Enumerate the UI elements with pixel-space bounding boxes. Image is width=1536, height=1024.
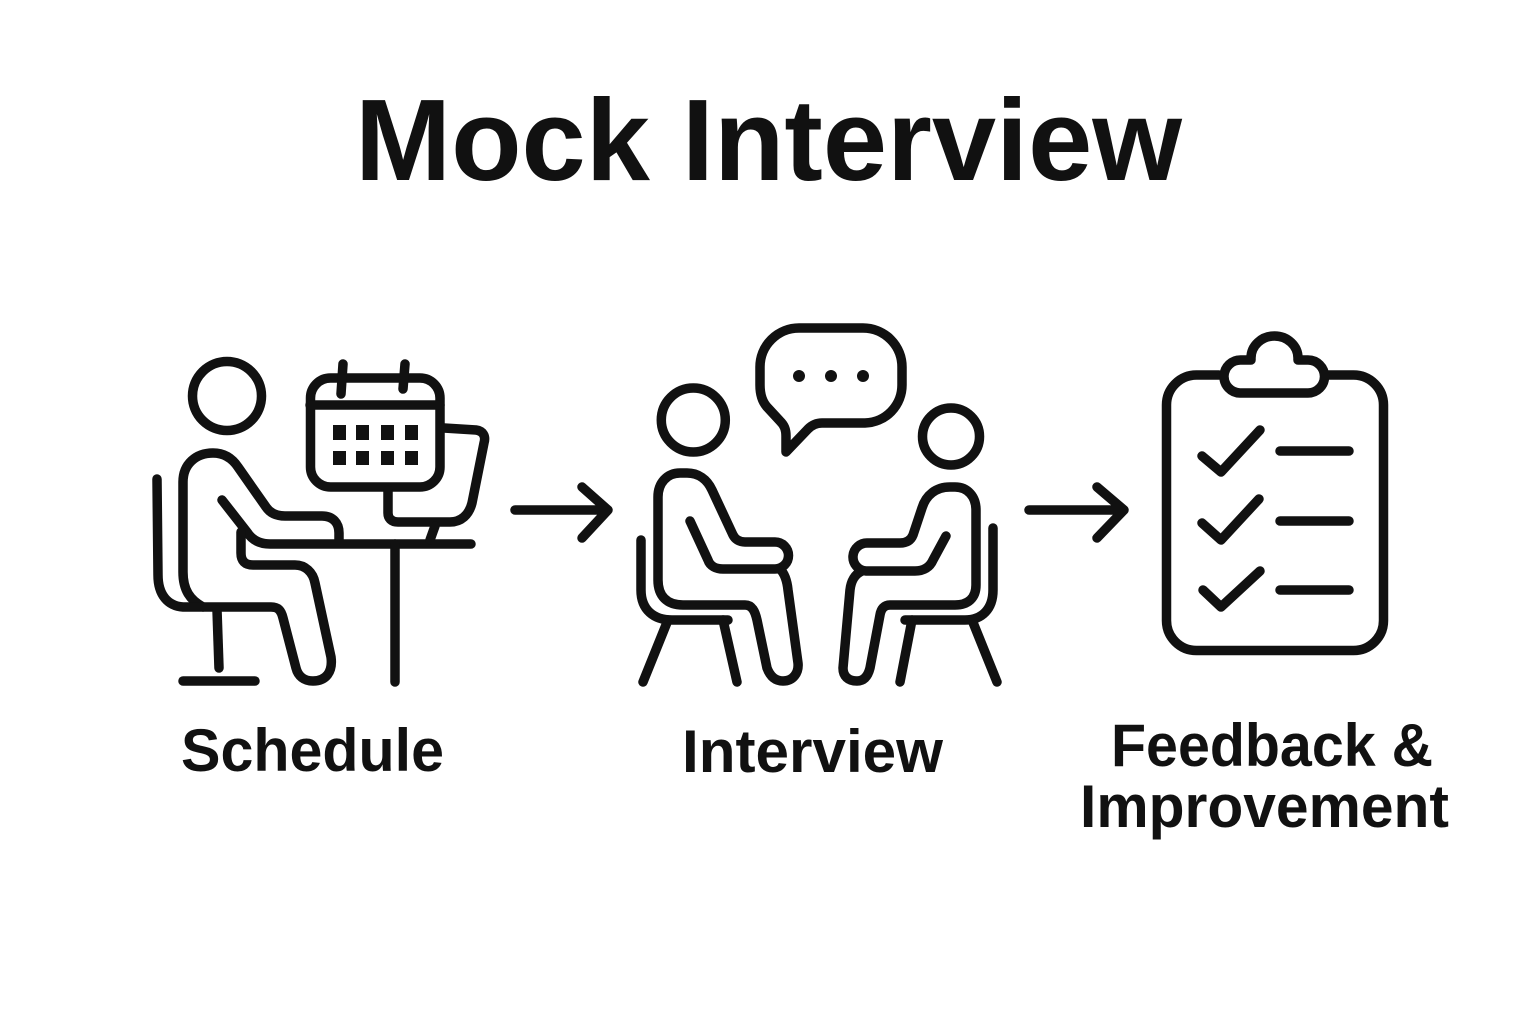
table leg <box>390 544 400 682</box>
left chair <box>641 540 728 620</box>
right person head <box>922 408 980 465</box>
left chair legs <box>643 620 737 682</box>
calendar date squares <box>333 425 418 465</box>
label: interview: Interview <box>682 718 943 785</box>
step 1: schedule <box>157 362 485 784</box>
seated leg and chair <box>157 479 331 681</box>
step 3: feedback and improvement <box>1080 336 1449 840</box>
check marks <box>1202 430 1260 607</box>
calendar <box>310 378 440 487</box>
chair post <box>217 610 219 668</box>
chair base <box>183 676 255 686</box>
arrow 2 <box>1029 487 1124 538</box>
speech bubble <box>760 328 902 452</box>
label: feedback and improvement <box>1080 712 1449 840</box>
icon: person at desk with calendar <box>157 362 485 682</box>
arrow 1 <box>515 487 608 538</box>
left person body <box>658 473 798 681</box>
right chair legs <box>900 620 997 682</box>
right person body <box>843 487 976 681</box>
label: feedback and improvement: Feedback & <box>1111 712 1433 779</box>
icon: two people talking <box>641 328 997 682</box>
label: feedback and improvement: Improvement <box>1080 773 1449 840</box>
clipboard clip <box>1224 336 1324 393</box>
right chair <box>905 528 993 620</box>
calendar rings <box>341 364 405 394</box>
laptop <box>388 428 485 522</box>
title: Mock Interview <box>355 75 1183 205</box>
inner arm and table top <box>222 500 471 544</box>
person head <box>192 362 262 430</box>
calendar header line <box>310 400 440 410</box>
speech dots <box>793 370 869 382</box>
label: schedule: Schedule <box>181 717 444 784</box>
left person head <box>661 388 725 452</box>
icon: clipboard checklist <box>1166 336 1384 651</box>
clipboard board <box>1166 375 1384 651</box>
checklist lines <box>1280 451 1349 590</box>
person torso and arm <box>183 453 339 607</box>
laptop stand <box>430 526 435 540</box>
step 2: interview <box>641 328 997 785</box>
